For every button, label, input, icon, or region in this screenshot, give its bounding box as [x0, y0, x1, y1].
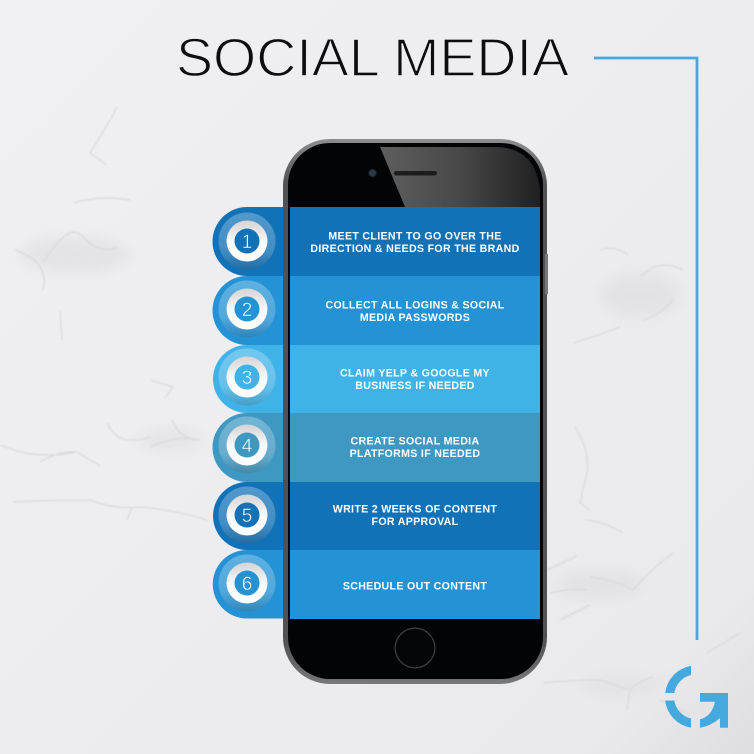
- step 2: [290, 276, 540, 345]
- screen glare: [380, 147, 540, 207]
- step 5: [290, 482, 540, 550]
- tab 5: 5: [242, 506, 252, 527]
- phone face: [288, 143, 543, 679]
- step 2: COLLECT ALL LOGINS & SOCIAL: [326, 300, 505, 312]
- tab 3: [213, 345, 285, 413]
- side button: [545, 254, 548, 294]
- step 1: [290, 207, 540, 276]
- tab 1: [212, 207, 285, 276]
- tab 1: 1: [242, 232, 252, 253]
- logo: [665, 666, 728, 728]
- title: SOCIAL MEDIA: [176, 28, 569, 88]
- tab 4: 4: [242, 436, 253, 457]
- front camera: [368, 169, 376, 177]
- phone body: [283, 139, 547, 684]
- tab 2: [212, 276, 285, 345]
- home button: [395, 628, 435, 668]
- step 1: DIRECTION & NEEDS FOR THE BRAND: [310, 243, 520, 255]
- step 4: CREATE SOCIAL MEDIA: [351, 436, 479, 448]
- step 4: PLATFORMS IF NEEDED: [350, 448, 480, 460]
- tab 6: [213, 550, 285, 618]
- step 2: MEDIA PASSWORDS: [360, 312, 470, 324]
- step tabs: [212, 207, 285, 618]
- smartphone: [283, 139, 548, 684]
- tab 5: [213, 482, 285, 550]
- step 5: WRITE 2 WEEKS OF CONTENT: [333, 504, 497, 516]
- step 1: MEET CLIENT TO GO OVER THE: [328, 230, 502, 242]
- tab 3: 3: [242, 368, 252, 389]
- speaker: [394, 171, 437, 176]
- step 3: [290, 345, 540, 413]
- step 3: BUSINESS IF NEEDED: [355, 380, 475, 392]
- step 6: SCHEDULE OUT CONTENT: [343, 580, 487, 592]
- step 5: FOR APPROVAL: [372, 516, 459, 528]
- screen steps: [290, 207, 540, 619]
- connector line: [594, 58, 697, 640]
- tab 6: 6: [242, 574, 252, 595]
- step 6: [290, 550, 540, 619]
- tab 2: 2: [242, 300, 252, 321]
- tab 4: [212, 413, 285, 482]
- step 4: [290, 413, 540, 482]
- step 3: CLAIM YELP & GOOGLE MY: [340, 368, 490, 380]
